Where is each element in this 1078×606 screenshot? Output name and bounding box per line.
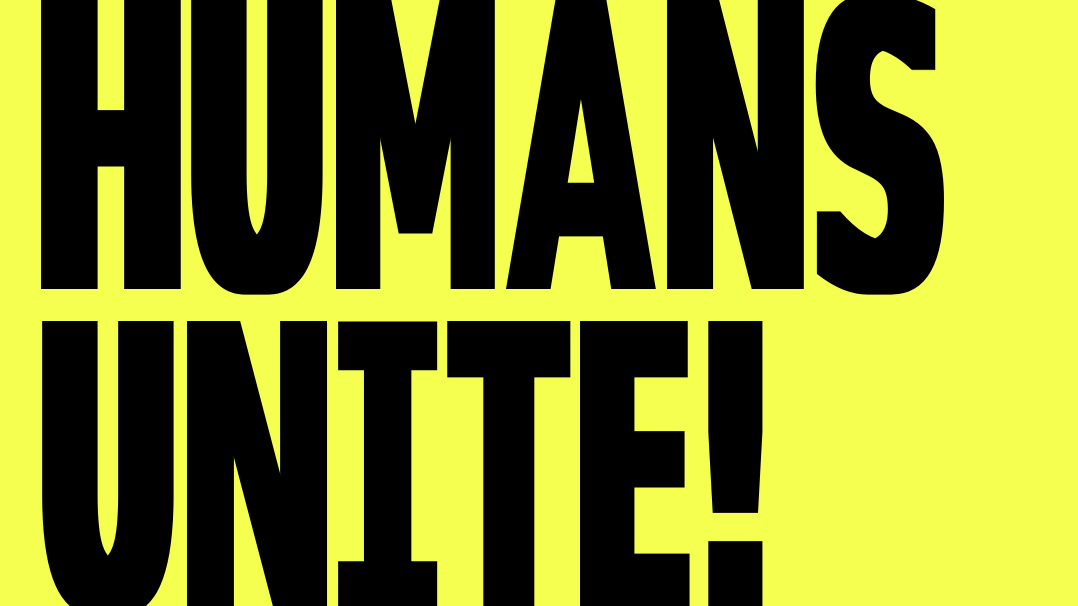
headline line 2: UNITE! <box>38 242 776 606</box>
headline line 1: HUMANS <box>36 0 946 384</box>
